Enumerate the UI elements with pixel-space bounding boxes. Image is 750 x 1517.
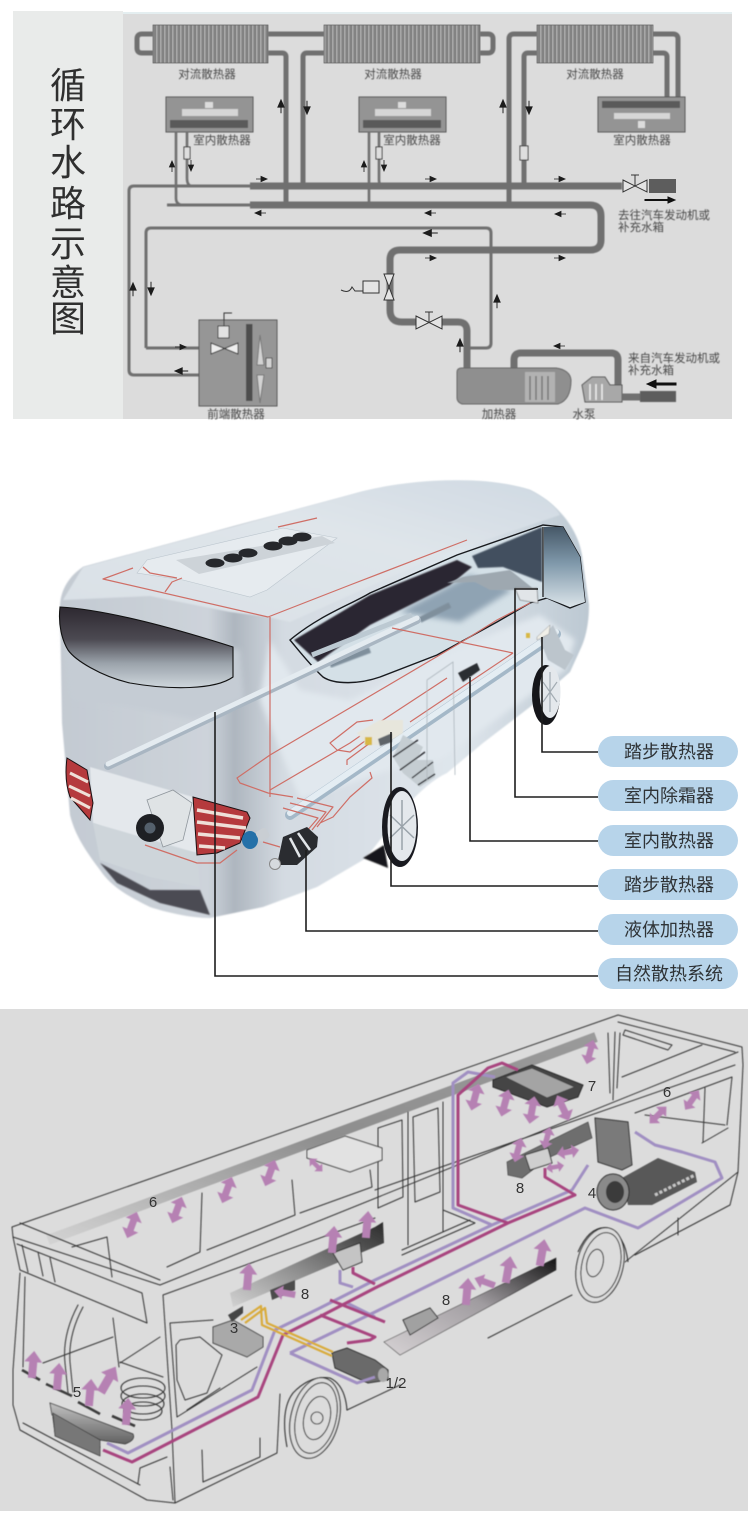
pipes [103, 1063, 722, 1462]
heater, compressor and pump [136, 790, 318, 870]
rear window [59, 607, 233, 688]
number labels: 7 [588, 1078, 596, 1095]
diagram labels: 室内散热器 [383, 133, 441, 147]
number labels [73, 1078, 671, 1401]
diagram labels: 前端散热器 [207, 407, 265, 421]
diagram labels [178, 67, 720, 421]
diagram labels: 水泵 [572, 408, 596, 421]
pipes: circuit network [129, 34, 678, 397]
diagram labels: 对流散热器 [364, 67, 422, 81]
roof AC unit [137, 528, 337, 597]
front bumper and grille [22, 1370, 135, 1456]
diagram labels: 对流散热器 [178, 67, 236, 81]
steps and radiators [357, 570, 574, 787]
callout pills: 踏步散热器 [624, 875, 714, 895]
title: vertical heading: 图 [50, 298, 86, 339]
panel: bus cutaway [0, 1009, 748, 1511]
tubes [108, 618, 556, 815]
panel: water circuit diagram [13, 11, 732, 421]
title: vertical heading: 意 [50, 262, 86, 303]
radiators: convection units [153, 25, 653, 63]
wheels [121, 1223, 632, 1464]
roof AC and components [213, 1065, 697, 1383]
number labels: 8 [442, 1292, 450, 1309]
valves and outlet [341, 175, 676, 329]
wheels [363, 665, 560, 868]
number labels: 3 [230, 1320, 238, 1337]
bus outline [12, 1015, 743, 1503]
heater and pump [457, 368, 676, 404]
diagram labels: 加热器 [482, 408, 517, 421]
number labels: 6 [663, 1084, 671, 1101]
diagram labels: 去往汽车发动机或 [618, 208, 710, 222]
number labels: 8 [516, 1180, 524, 1197]
title: vertical heading: 环 [50, 104, 86, 145]
callout pills: 室内除霜器 [624, 786, 714, 806]
callout pills [598, 736, 738, 989]
callout pills: 液体加热器 [624, 920, 714, 940]
callout pills: 自然散热系统 [615, 964, 723, 984]
title: vertical heading: 水 [50, 142, 86, 183]
indoor radiators [166, 97, 685, 160]
diagram labels: 补充水箱 [618, 220, 664, 234]
coach body [60, 481, 589, 918]
callout pills: 室内散热器 [624, 831, 714, 851]
front radiator [199, 313, 277, 406]
air flow arrows [23, 1038, 705, 1426]
callout lines [215, 589, 598, 976]
flow arrows [130, 100, 676, 388]
number labels: 8 [301, 1286, 309, 1303]
number labels: 1/2 [386, 1375, 406, 1392]
diagram labels: 室内散热器 [613, 133, 671, 147]
title: vertical heading [50, 65, 86, 339]
title: vertical heading: 循 [50, 65, 86, 106]
title: vertical heading: 路 [50, 183, 86, 224]
tail lights [66, 758, 250, 855]
title: vertical heading: 示 [50, 223, 86, 264]
number labels: 6 [149, 1194, 157, 1211]
red piping [103, 518, 530, 863]
callout pills: 踏步散热器 [624, 742, 714, 762]
side window [290, 525, 585, 683]
diagram labels: 室内散热器 [193, 133, 251, 147]
diagram labels: 补充水箱 [628, 363, 674, 377]
roof rail [48, 1037, 596, 1240]
diagram labels: 来自汽车发动机或 [628, 351, 720, 365]
number labels: 5 [73, 1384, 81, 1401]
number labels: 4 [588, 1185, 596, 1202]
diagram labels: 对流散热器 [566, 67, 624, 81]
panel: coach cutaway [59, 481, 738, 989]
